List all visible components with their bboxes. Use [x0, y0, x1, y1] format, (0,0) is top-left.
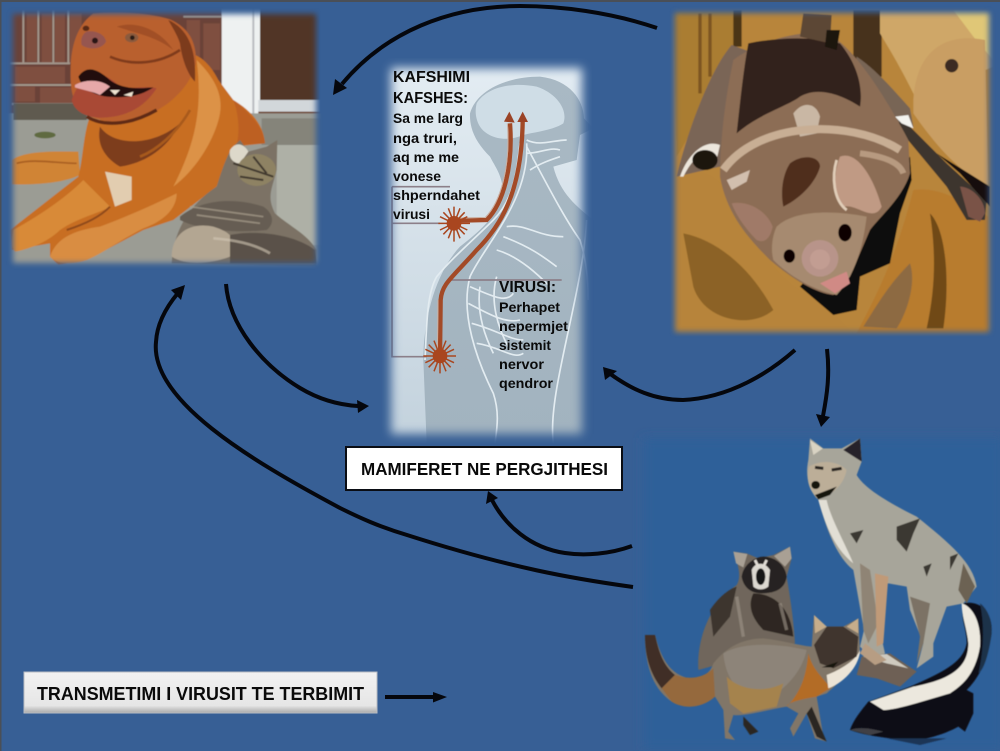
ground	[7, 113, 323, 270]
head	[720, 33, 910, 295]
dog body	[10, 55, 265, 265]
arrow: dog to diagram	[226, 284, 369, 413]
arrow: bat to dog	[333, 6, 657, 95]
wood background	[670, 7, 997, 337]
dog hind leg	[12, 152, 80, 184]
panel background	[643, 438, 1000, 750]
legend arrow	[385, 692, 447, 702]
arrowheads	[504, 112, 528, 123]
photo: wild mammals	[643, 438, 1000, 750]
fox	[645, 615, 860, 742]
arrow: wild mammals to dog	[156, 285, 633, 587]
photo: dog and cat	[7, 7, 323, 270]
cat	[172, 140, 317, 267]
mouth	[72, 74, 157, 118]
text: virus note: nepermjet	[499, 318, 568, 334]
text: virus note: nervor	[499, 356, 545, 372]
dog head	[71, 12, 196, 122]
nerves	[425, 140, 588, 443]
wall	[7, 7, 223, 113]
virus paths	[440, 122, 523, 357]
text: virus note: VIRUSI:	[499, 279, 556, 296]
coyote	[807, 438, 977, 668]
ears	[835, 156, 882, 213]
bite marks	[423, 207, 470, 373]
text: bite description: shperndahet	[393, 187, 480, 203]
panel: nervous system diagram	[380, 58, 593, 444]
label: mammals in general	[346, 447, 622, 490]
text: bite heading: KAFSHIMI	[393, 69, 470, 86]
lower wood	[830, 310, 836, 314]
text: virus note: Perhapet	[499, 299, 560, 315]
left wing	[676, 44, 748, 177]
legend button: rabies transmission	[24, 672, 377, 713]
label: mammals in general: MAMIFERET NE PERGJITHESI	[361, 459, 608, 479]
skunk	[850, 603, 992, 740]
text: bite description: vonese	[393, 168, 441, 184]
dark crown	[737, 38, 861, 133]
text: bite description: aq me me	[393, 149, 459, 165]
connector lines	[392, 187, 562, 357]
text: virus note	[499, 279, 568, 391]
arrow: wild mammals to mammals label	[486, 491, 632, 554]
photo: vampire bat	[670, 7, 997, 337]
arrow: bat to diagram	[603, 350, 795, 400]
brain	[476, 85, 564, 139]
text: bite description	[393, 110, 480, 222]
text: bite description: virusi	[393, 206, 430, 222]
body silhouette	[423, 77, 593, 443]
text: bite description: nga truri,	[393, 130, 457, 146]
legend button: rabies transmission: TRANSMETIMI I VIRUSIT TE TERBIMIT	[37, 684, 364, 704]
right wing	[856, 56, 914, 127]
branch	[857, 653, 917, 687]
text: bite heading: KAFSHES:	[393, 90, 468, 107]
light fur bands	[793, 105, 820, 137]
arrow: bat to wild mammals	[816, 349, 830, 427]
face	[772, 212, 867, 295]
text: bite heading	[393, 69, 480, 222]
text: bite description: Sa me larg	[393, 110, 463, 126]
door and frame	[222, 8, 260, 115]
shadow under head	[800, 157, 912, 315]
text: virus note: qendror	[499, 375, 554, 391]
text: virus note: sistemit	[499, 337, 551, 353]
raccoon	[698, 547, 795, 670]
